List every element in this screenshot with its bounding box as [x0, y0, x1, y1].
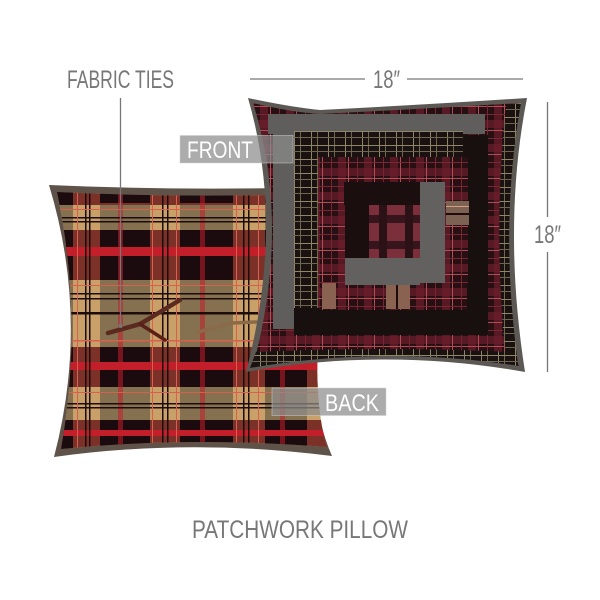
right check strip — [499, 103, 521, 364]
label: front: FRONT — [187, 137, 253, 164]
height dimension: 18″ — [534, 221, 561, 249]
black cells — [50, 185, 307, 455]
back pillow border — [49, 185, 332, 457]
check band left — [294, 158, 318, 308]
black band bottom — [294, 308, 488, 335]
label: back: BACK — [325, 390, 379, 417]
outer red plaid band — [253, 103, 520, 366]
dark thin lines — [62, 193, 320, 447]
black centre top — [344, 182, 421, 205]
red plaid top — [318, 157, 445, 182]
red plaid right — [445, 157, 468, 283]
grey band left — [273, 134, 294, 329]
pillow: front view — [246, 98, 527, 372]
pillow: back view — [49, 185, 335, 457]
black centre left — [345, 205, 369, 258]
leader line: fabric ties — [118, 98, 122, 328]
bottom check strip — [250, 349, 519, 368]
back pillow plaid fabric — [50, 185, 335, 455]
grey band top — [268, 114, 485, 134]
grey centre bottom — [345, 258, 420, 285]
dark rows — [50, 185, 335, 455]
red stripes — [63, 194, 324, 444]
label: fabric ties: FABRIC TIES — [67, 66, 174, 94]
front pillow outer edge — [246, 98, 527, 372]
label: front — [180, 136, 293, 164]
grey centre right — [420, 182, 445, 283]
check band top — [294, 131, 463, 158]
red plaid bottom — [320, 282, 467, 310]
caption: PATCHWORK PILLOW — [192, 516, 408, 544]
label: back — [272, 388, 386, 417]
light red thin lines — [60, 192, 318, 448]
red plaid left — [320, 182, 345, 282]
tan patch on right strip — [446, 201, 469, 225]
width dimension: 18″ — [373, 66, 400, 94]
fabric ties bow — [108, 300, 256, 340]
centre plaid — [369, 205, 421, 259]
dark columns — [60, 205, 307, 420]
black band right — [460, 135, 488, 330]
